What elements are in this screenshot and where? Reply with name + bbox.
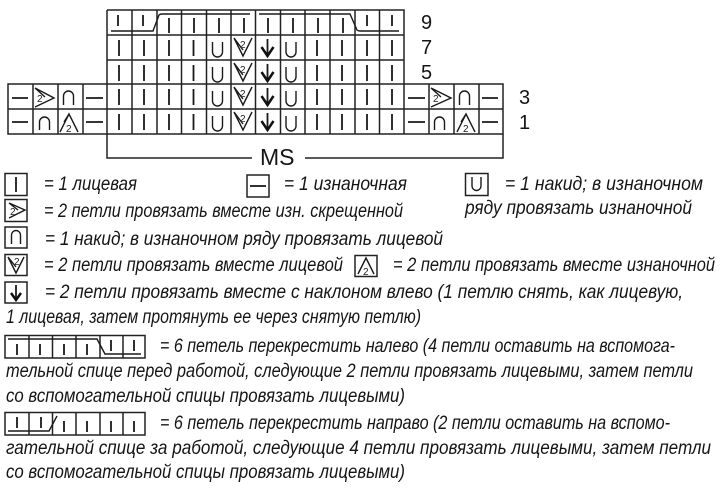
legend: knit decrease: = 2 петли провязать вместе лицевой (44, 255, 343, 276)
legend: left cable (5, 336, 693, 407)
knit stitches (119, 40, 392, 130)
row numbers: 3 (519, 87, 530, 109)
row 1 purl decreases: 2 (66, 124, 72, 135)
legend: yarn over purl: = 1 накид; в изнаночном (505, 174, 703, 195)
grid lines (8, 10, 503, 134)
row numbers: 5 (421, 62, 432, 84)
legend: purl: = 1 изнаночная (284, 174, 407, 195)
legend: right cable: со вспомогательной спицы провязать лицевыми) (6, 462, 405, 483)
legend: yarn over purl (464, 174, 703, 219)
legend: purl (247, 174, 407, 197)
legend: twisted purl decrease: = 2 петли провязать вместе изн. скрещенной (44, 201, 403, 222)
row 3 twisted purl decreases (35, 88, 451, 107)
knit two together stitches: 2 (240, 114, 246, 125)
legend: knit: = 1 лицевая (44, 174, 137, 195)
legend: left-leaning decrease: 1 лицевая, затем протянуть ее через снятую петлю) (6, 307, 421, 328)
purl stitches (12, 98, 498, 122)
knit two together stitches: 2 (240, 40, 246, 51)
legend: left-leaning decrease (5, 282, 683, 328)
legend: twisted purl decrease: 2 (10, 207, 16, 218)
legend: yarn over knit: = 1 накид; в изнаночном ряду провязать лицевой (45, 229, 443, 250)
yarn over stitches U (212, 42, 296, 131)
legend: right cable (5, 412, 711, 483)
bracket: MS repeat: MS (260, 144, 294, 170)
knit two together stitches (234, 38, 252, 130)
row 3 and row 1 yarn overs (40, 91, 470, 130)
row 1 purl decreases (60, 114, 475, 135)
row numbers: 1 (519, 112, 530, 134)
row numbers: 9 (421, 12, 432, 34)
legend: knit decrease: 2 (14, 257, 20, 268)
row 3 twisted purl decreases: 2 (433, 94, 439, 105)
decrease arrows (262, 39, 274, 131)
knit two together stitches: 2 (240, 89, 246, 100)
legend: purl decrease: 2 (363, 267, 369, 278)
row 1 purl decreases: 2 (463, 124, 469, 135)
chart: knitting grid (8, 10, 503, 135)
row numbers: 7 (421, 37, 432, 59)
row numbers (421, 12, 530, 134)
legend: yarn over purl: ряду провязать изнаночной (464, 198, 692, 219)
cable stitches: row 9 (111, 14, 399, 33)
legend: left cable: со вспомогательной спицы провязать лицевыми) (6, 386, 405, 407)
row 3 twisted purl decreases: 2 (37, 94, 43, 105)
bracket: MS repeat (107, 134, 503, 170)
knit two together stitches: 2 (240, 65, 246, 76)
legend: knit (5, 174, 137, 196)
